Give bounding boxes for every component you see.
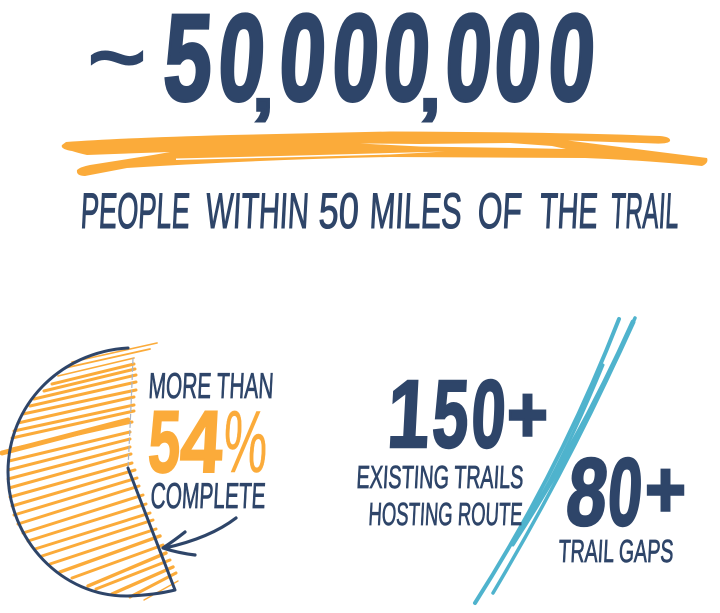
label: existing trails hosting route: EXISTING TRAILS <box>356 459 525 495</box>
arrow pointing to pie <box>163 518 236 555</box>
stat: 150+: 0 <box>469 361 509 468</box>
subtitle: people within 50 miles of the trail: THE <box>538 183 599 239</box>
subtitle: people within 50 miles of the trail: OF <box>476 183 523 239</box>
headline number: ~50,000,000 <box>88 0 600 127</box>
label: existing trails hosting route <box>356 459 525 532</box>
faint dashed edge <box>128 358 133 468</box>
stat: 80+: 0 <box>605 439 646 546</box>
subtitle: people within 50 miles of the trail: PEOPLE <box>79 183 191 239</box>
headline number: ~50,000,000: , <box>253 47 273 125</box>
subtitle: people within 50 miles of the trail: 50 <box>317 183 360 239</box>
text: more than: MORE THAN <box>148 365 275 406</box>
stat: 80+: 8 <box>562 439 613 546</box>
teal slash divider <box>475 318 635 603</box>
label: existing trails hosting route: HOSTING ROUTE <box>368 496 524 532</box>
subtitle: people within 50 miles of the trail <box>79 183 680 239</box>
orange hatching <box>2 343 178 600</box>
stat: 80+: + <box>645 445 686 534</box>
text: complete: COMPLETE <box>150 475 267 516</box>
pie chart: 54 percent complete <box>2 343 178 600</box>
stat: 80+ <box>562 439 686 546</box>
text: 54%: % <box>221 392 270 491</box>
pie outline <box>8 348 175 596</box>
stat: 150+: 5 <box>430 361 472 468</box>
subtitle: people within 50 miles of the trail: MILES <box>368 183 463 239</box>
stat: 150+: 1 <box>385 361 433 468</box>
stat: 150+ <box>385 361 548 468</box>
headline number: ~50,000,000: ~ <box>88 4 146 111</box>
text: 54% <box>146 392 270 491</box>
text: 54%: 5 <box>146 392 183 491</box>
text: 54%: 4 <box>178 392 225 491</box>
subtitle: people within 50 miles of the trail: WITHIN <box>204 183 310 239</box>
orange brush underline <box>62 132 707 176</box>
headline number: ~50,000,000: , <box>420 47 440 125</box>
stat: 150+: + <box>507 370 548 459</box>
